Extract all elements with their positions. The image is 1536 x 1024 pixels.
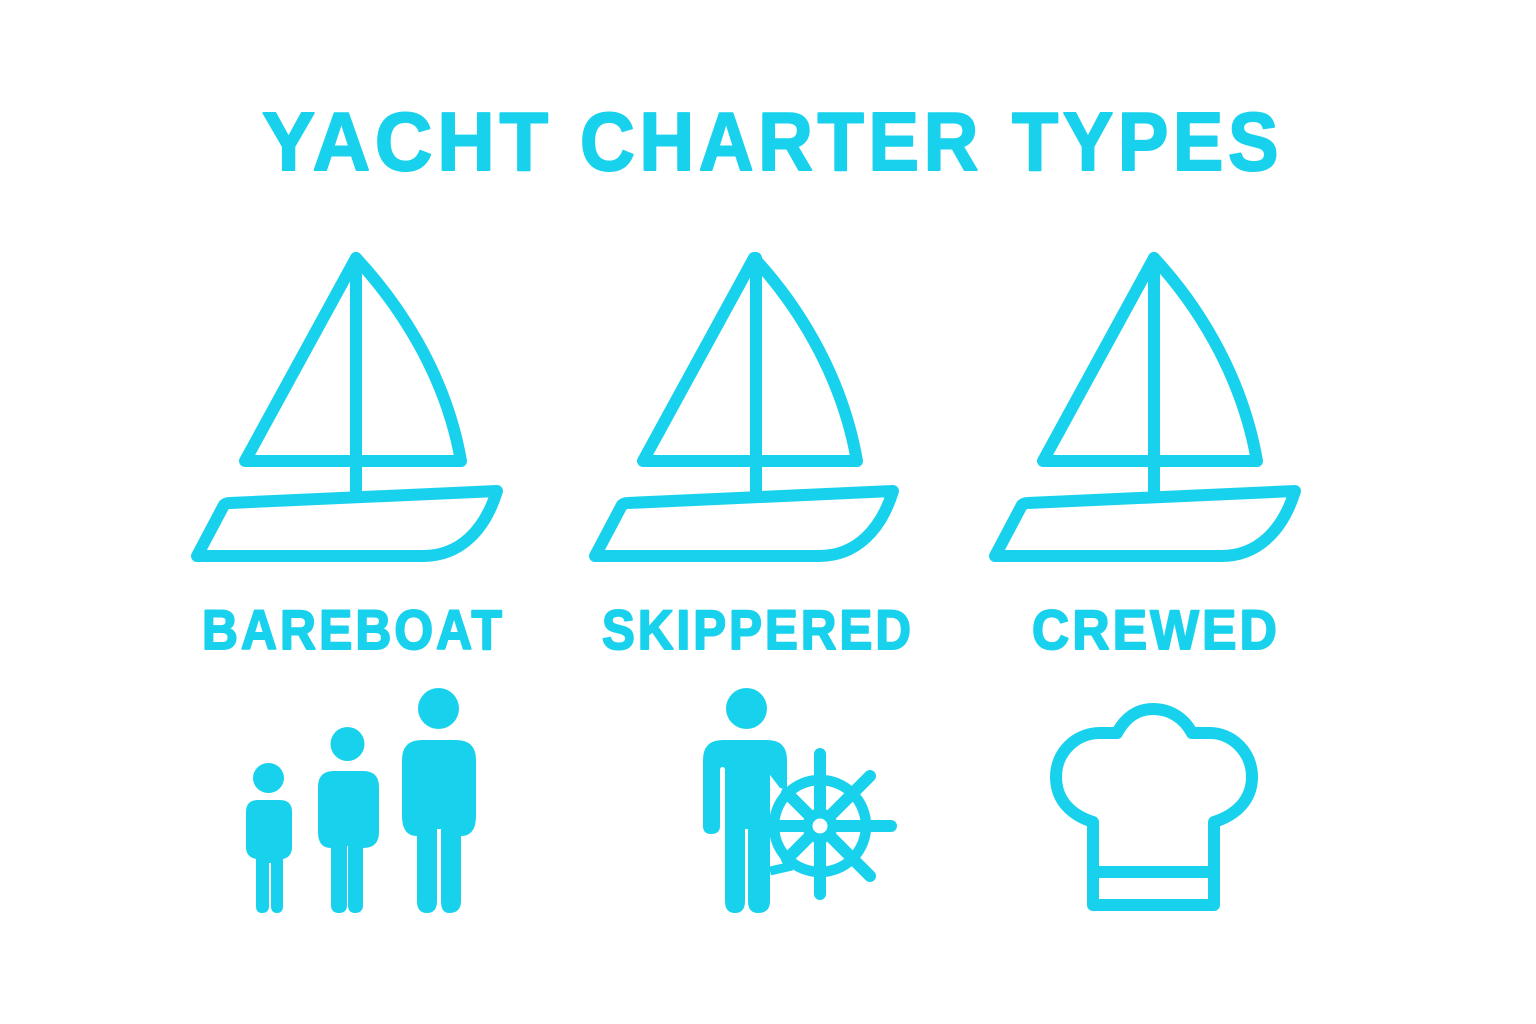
panel: bareboat [197, 258, 505, 913]
label: bareboat: BAREBOAT [202, 598, 505, 661]
panel: skippered [595, 258, 914, 913]
icon: family of three people [246, 688, 476, 913]
title: TYPES [1012, 95, 1283, 188]
title [262, 95, 1283, 188]
icon: sailboat [595, 258, 893, 556]
panel: crewed [995, 258, 1295, 905]
title: CHARTER [580, 95, 983, 188]
label: skippered: SKIPPERED [602, 598, 914, 661]
ship wheel [770, 754, 891, 894]
skipper figure [703, 688, 787, 913]
title: YACHT [262, 95, 553, 188]
icon: sailboat [197, 258, 497, 556]
icon: chef hat [1056, 709, 1252, 905]
icon: skipper with ship wheel [703, 688, 891, 913]
icon: sailboat [995, 258, 1295, 556]
label: crewed: CREWED [1032, 598, 1280, 661]
